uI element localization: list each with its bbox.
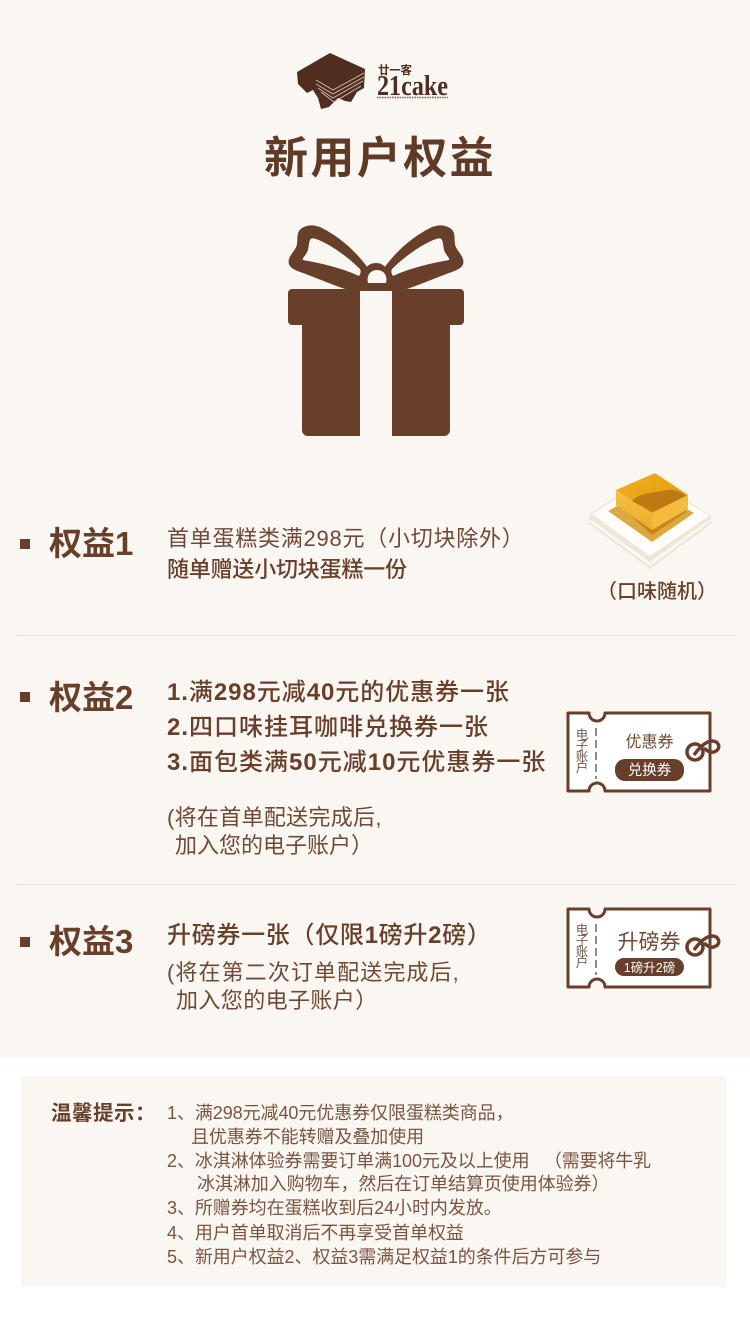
tips heading: 温馨提示： [51,1102,156,1125]
coupon ticket: 升磅券 [566,908,720,988]
panel: tips [21,1076,726,1287]
coupon ticket: 升磅券: 电 [576,923,589,937]
divider [16,635,736,636]
benefit 1 bullet [20,539,30,549]
benefit 2 item 3: 3.面包类满50元减10元优惠券一张 [167,749,546,776]
panel: benefit 3 [20,908,720,1013]
divider [16,884,736,885]
coupon ticket: 优惠券: 电 [576,728,589,742]
coupon ticket: 升磅券: 升磅券 [618,931,680,954]
benefit 2 note line 2: 加入您的电子账户） [175,833,373,858]
benefit 1 heading: 权益1 [49,525,133,562]
cake caption: （口味随机） [597,581,717,603]
tip 1 continued: 且优惠券不能转赠及叠加使用 [191,1127,424,1147]
logo: 21cake: 廿一客 [378,63,412,77]
tip 3: 3、所赠券均在蛋糕收到后24小时内发放。 [167,1198,502,1218]
coupon ticket: 升磅券: 子 [576,934,588,948]
benefit 2 heading: 权益2 [49,679,133,716]
benefit 2 item 1: 1.满298元减40元的优惠券一张 [167,679,510,706]
benefit 3 note line 2: 加入您的电子账户） [176,988,378,1013]
coupon ticket: 优惠券: 优惠券 [625,733,674,751]
coupon ticket: 优惠券: 户 [576,760,588,775]
benefit 3 description: 升磅券一张（仅限1磅升2磅） [167,922,492,949]
benefit 1 description line 1: 首单蛋糕类满298元（小切块除外） [167,526,524,551]
benefit 3 heading: 权益3 [49,923,133,960]
coupon ticket: 优惠券: 兑换券 [628,762,672,779]
tip 5: 5、新用户权益2、权益3需满足权益1的条件后方可参与 [167,1247,601,1267]
tip 1: 1、满298元减40元优惠券仅限蛋糕类商品， [167,1103,514,1123]
benefit 1 description line 2: 随单赠送小切块蛋糕一份 [167,557,407,582]
tip 4: 4、用户首单取消后不再享受首单权益 [167,1223,464,1243]
benefit 3 note line 1: (将在第二次订单配送完成后, [167,960,460,985]
tip 2: 2、冰淇淋体验券需要订单满100元及以上使用 [167,1151,530,1171]
tip 2 bracket text: （需要将牛乳 [544,1151,651,1171]
logo: 21cake: 21cake [377,70,448,102]
benefit 2 bullet [20,692,30,702]
panel: benefit 1 [20,473,717,603]
cake photo [589,473,711,569]
coupon ticket: 优惠券: 账 [576,750,589,764]
coupon ticket: 升磅券: 账 [576,945,589,959]
panel: benefit 2 [20,679,720,858]
icon: gift box [288,225,464,436]
benefit 2 note line 1: (将在首单配送完成后, [167,805,382,830]
coupon ticket: 优惠券 [566,712,720,792]
logo: 21cake [297,53,448,109]
coupon ticket: 优惠券: 子 [576,739,588,753]
tip 2 continued: 冰淇淋加入购物车，然后在订单结算页使用体验券） [197,1174,609,1194]
benefit 3 bullet [20,937,30,947]
benefit 2 item 2: 2.四口味挂耳咖啡兑换券一张 [167,714,489,741]
coupon ticket: 升磅券: 1磅升2磅 [624,960,675,975]
coupon ticket: 升磅券: 户 [576,955,588,970]
title: 新用户权益 [264,134,496,183]
